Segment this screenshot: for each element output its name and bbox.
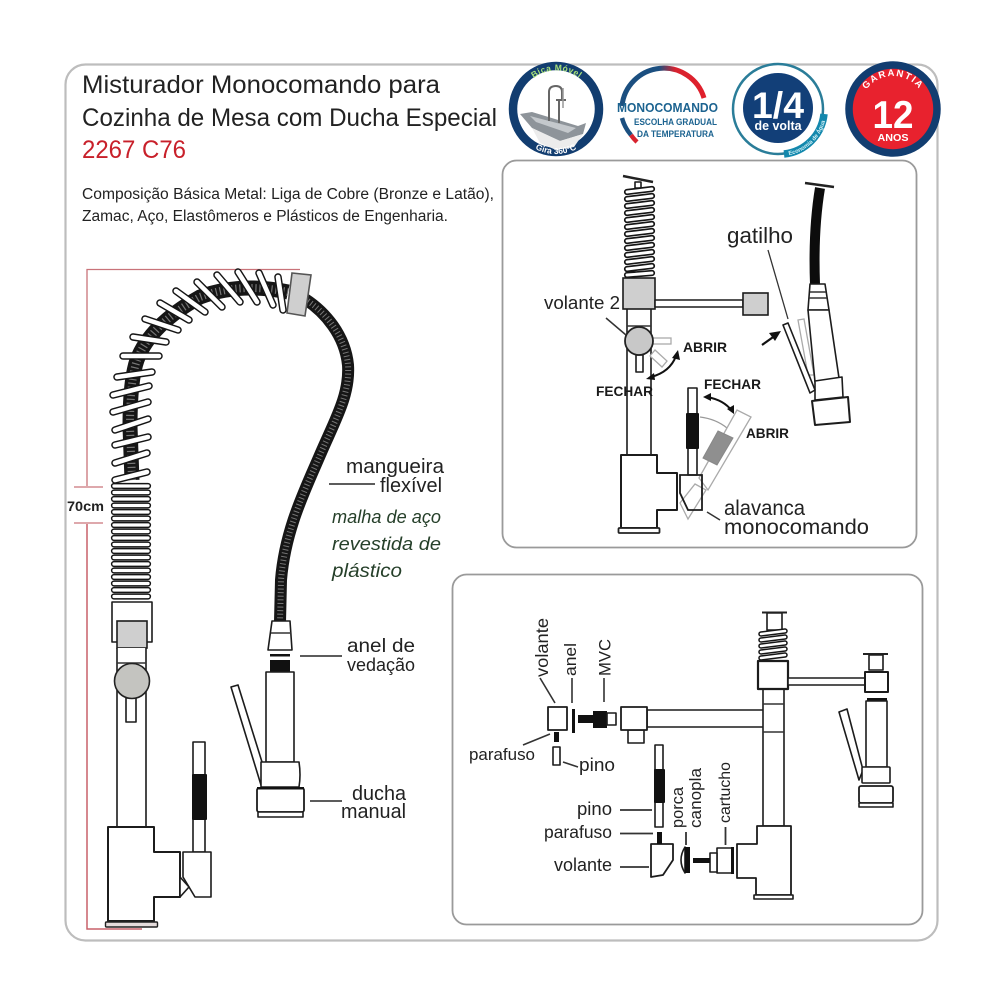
badge: monocomando: MONOCOMANDO [617, 101, 718, 115]
base plate [618, 528, 660, 533]
label: malha de aco: revestida de [332, 533, 441, 554]
volante knob [625, 327, 653, 355]
badge: 1/4 de volta: de volta [754, 118, 802, 133]
shower body [257, 672, 304, 817]
leader lines upper [523, 678, 604, 767]
dimension: 70cm [67, 270, 300, 929]
badge: bica movel: Bica Móvel [530, 64, 582, 78]
labels: abrir fechar: ABRIR [683, 339, 727, 355]
label: anel de vedacao [300, 635, 415, 675]
lower labels: parafuso [544, 822, 612, 842]
vertical lower labels [669, 762, 734, 828]
faucet: main diagram [106, 272, 348, 927]
hose coupling [268, 621, 292, 672]
spring top [761, 612, 787, 658]
volante handle [126, 698, 136, 722]
alavanca monocomando label: monocomando [724, 515, 869, 539]
title: Cozinha de Mesa com Ducha Especial [82, 104, 497, 132]
labels: fechar abrir lever: ABRIR [746, 425, 789, 441]
composition text: Composição Básica Metal: Liga de Cobre (Bronze e Latão), [82, 186, 494, 203]
label: mangueira flexivel: flexível [380, 475, 442, 497]
label: mangueira flexivel: mangueira [346, 456, 445, 478]
arrow: abrir fechar volante [646, 350, 680, 380]
canopla and porca part [681, 847, 690, 873]
faucet tube [627, 309, 651, 455]
labels: abrir fechar [596, 339, 727, 399]
pino part [553, 747, 560, 765]
panel: parts [452, 574, 922, 924]
hand shower [783, 183, 850, 425]
composition text: Zamac, Aço, Elastômeros e Plásticos de Engenharia. [82, 208, 448, 225]
labels: fechar abrir lever: FECHAR [704, 376, 761, 392]
vertical labels [532, 618, 614, 677]
label: malha de aco: plástico [331, 561, 402, 582]
vertical labels: volante [532, 618, 552, 677]
arrow: gatilho [762, 331, 781, 345]
title [82, 71, 497, 164]
arm end [743, 293, 768, 315]
faucet spring [627, 189, 652, 275]
ghost arc [700, 417, 727, 428]
badge: monocomando: DA TEMPERATURA [637, 129, 714, 140]
labels: abrir fechar: FECHAR [596, 383, 653, 399]
ghost lever [680, 410, 751, 519]
label: ducha manual: manual [341, 801, 406, 823]
arrow: fechar abrir lever [703, 393, 734, 414]
badge: monocomando: ESCOLHA GRADUAL [634, 117, 717, 128]
volante 2 label [544, 292, 626, 335]
lower labels: pino [577, 799, 612, 819]
label: anel de vedacao: vedação [347, 654, 415, 675]
parafuso lower part [657, 832, 662, 844]
badge: garantia 12 anos: GARANTIA [862, 69, 922, 88]
vertical lower labels: porca [669, 786, 687, 828]
title: 2267 C76 [82, 136, 186, 164]
MVC part [578, 711, 616, 728]
lower leader lines [620, 810, 726, 867]
spout head [287, 273, 311, 316]
outer frame [66, 64, 938, 940]
title: Misturador Monocomando para [82, 71, 440, 99]
lever body [180, 852, 211, 897]
base plate [754, 895, 793, 899]
gatilho label: gatilho [727, 223, 793, 248]
base plate [106, 922, 158, 927]
ring line [627, 325, 651, 327]
lever stem [192, 742, 207, 852]
badge: garantia 12 anos [845, 61, 941, 157]
vertical labels: anel [561, 643, 580, 676]
pino lever [654, 745, 665, 827]
label: ducha manual [310, 783, 407, 823]
badge: 1/4 de volta [732, 62, 828, 158]
label: anel de vedacao: anel de [347, 635, 415, 657]
parafuso part [554, 732, 559, 742]
faucet top bar [623, 176, 653, 188]
alavanca monocomando label: alavanca [724, 496, 805, 520]
lever stem [686, 388, 699, 475]
cartucho part [693, 847, 734, 874]
faucet base [621, 455, 677, 528]
badge: bica movel [508, 62, 604, 156]
pino label: pino [579, 755, 615, 775]
shower trigger [231, 685, 262, 785]
label: malha de aco: malha de aço [332, 507, 441, 527]
badge: monocomando [617, 68, 718, 142]
label: malha de aco [331, 507, 441, 582]
elbow [621, 707, 647, 743]
volante part [548, 707, 567, 730]
tube [763, 689, 784, 826]
hose outer [280, 299, 348, 622]
alavanca monocomando label [707, 496, 869, 539]
base [737, 826, 791, 895]
parafuso label: parafuso [469, 745, 535, 764]
ring line [117, 662, 146, 664]
badge: bica movel: Gira 360°C [536, 144, 576, 154]
collar [112, 602, 152, 648]
dimension: 70cm: 70cm [67, 498, 104, 514]
volante knob [114, 664, 150, 698]
collar [623, 278, 655, 309]
label: mangueira flexivel [329, 456, 445, 497]
volante 2 label: volante 2 [544, 292, 620, 313]
ghost handle [650, 338, 671, 367]
vertical lower labels: cartucho [717, 762, 734, 823]
badge: 1/4 de volta: Economia de Água [788, 120, 825, 156]
vertical lower labels: canopla [686, 767, 705, 828]
side arm [788, 678, 865, 685]
lower labels: volante [554, 855, 612, 875]
collar [758, 661, 788, 689]
vertical labels: MVC [596, 639, 614, 676]
lever body [680, 475, 702, 510]
labels: fechar abrir lever [704, 376, 789, 441]
horizontal arm [647, 710, 764, 727]
volante lower part [651, 844, 673, 877]
gatilho label [727, 223, 793, 319]
composition text [82, 186, 494, 225]
base [108, 827, 180, 921]
badge: 1/4 de volta: 1/4 [752, 85, 804, 126]
label: ducha manual: ducha [352, 783, 407, 805]
body tube [117, 648, 146, 827]
anel part [572, 709, 575, 733]
spring [113, 272, 283, 596]
volante handle [636, 355, 643, 372]
badge: garantia 12 anos: ANOS [878, 133, 909, 144]
tube rings [763, 704, 784, 732]
lower labels [544, 799, 612, 875]
hand shower [839, 654, 893, 807]
badge: garantia 12 anos: 12 [872, 94, 914, 137]
arm [655, 300, 743, 307]
panel: operation [502, 160, 916, 548]
hose inside spring [130, 288, 288, 480]
